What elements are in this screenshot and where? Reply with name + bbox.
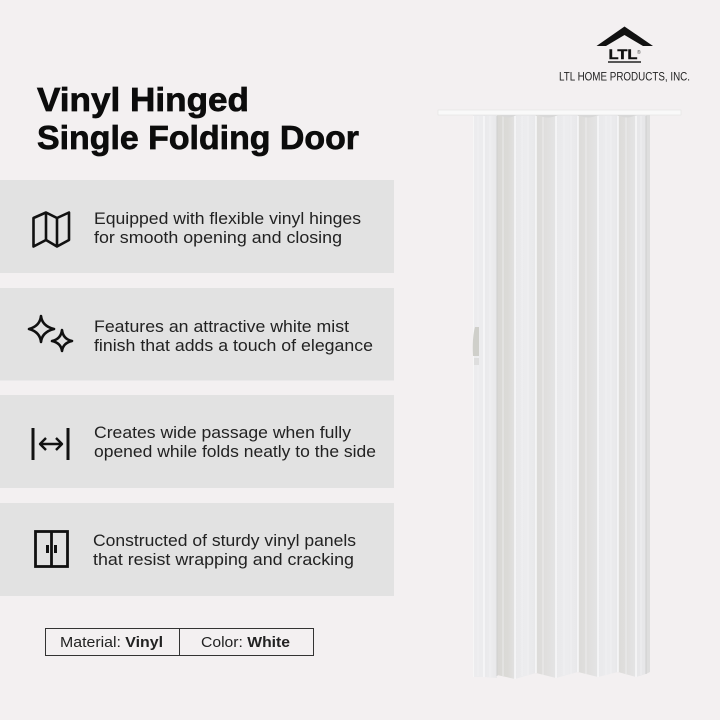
feature text 4: that resist wrapping and cracking [93, 551, 354, 569]
door product image [438, 110, 681, 679]
spec table [46, 628, 314, 656]
feature text 1 [94, 210, 361, 247]
icon: sparkles [29, 316, 72, 351]
feature text 2: Features an attractive white mist [94, 318, 349, 336]
material label: Material: Vinyl [60, 634, 163, 651]
title: Single Folding Door [37, 119, 359, 156]
panel: flexible hinges [0, 180, 394, 273]
feature text 3 [94, 424, 376, 461]
panel: wide passage [0, 395, 394, 488]
feature text 3: opened while folds neatly to the side [94, 443, 376, 461]
feature text 4 [93, 532, 356, 569]
icon: width arrows [33, 428, 68, 460]
icon: roof [596, 26, 653, 46]
logo letters: LTL [608, 46, 638, 62]
panel: sturdy panels [0, 503, 394, 596]
panel: white mist finish [0, 288, 394, 380]
color label: Color: White [201, 634, 290, 651]
feature text 1: Equipped with flexible vinyl hinges [94, 210, 361, 228]
icon: double door [36, 532, 68, 566]
fold lines [474, 116, 646, 679]
door panels [473, 114, 650, 679]
feature text 1: for smooth opening and closing [94, 229, 342, 247]
registered mark: ® [637, 49, 641, 56]
company name: LTL HOME PRODUCTS, INC. [559, 72, 690, 84]
logo [559, 26, 690, 84]
title [37, 81, 359, 156]
feature text 4: Constructed of sturdy vinyl panels [93, 532, 356, 550]
top rail [438, 110, 681, 115]
feature text 3: Creates wide passage when fully [94, 424, 352, 442]
wood grain streaks [478, 116, 641, 677]
door handle [473, 327, 479, 356]
feature text 2: finish that adds a touch of elegance [94, 337, 373, 355]
title: Vinyl Hinged [37, 81, 249, 118]
feature text 2 [94, 318, 373, 355]
icon: folded map [34, 212, 69, 246]
rail hangers [500, 115, 636, 118]
